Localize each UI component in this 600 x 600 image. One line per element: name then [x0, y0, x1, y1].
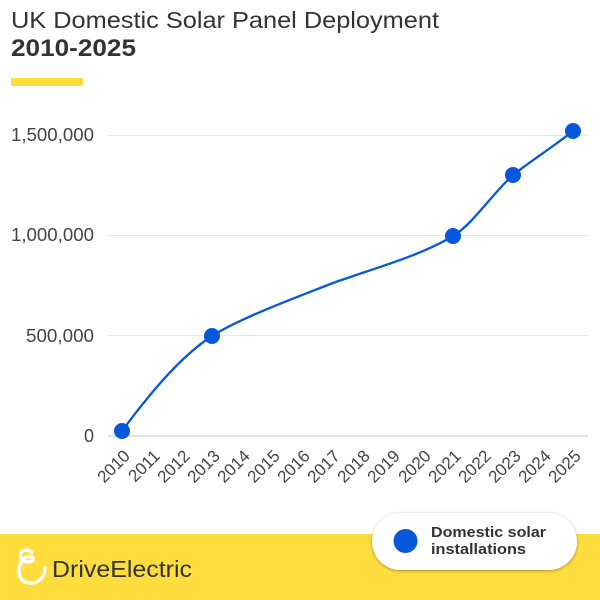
- legend: Domestic solar: [431, 524, 546, 541]
- x-axis year labels: 2022: [455, 446, 495, 487]
- x-axis year labels: 2025: [545, 446, 585, 487]
- x-axis year labels: 2013: [184, 446, 224, 487]
- title: [11, 7, 440, 62]
- x-axis year labels: 2012: [154, 446, 194, 487]
- x-axis year labels: 2016: [274, 446, 314, 487]
- x-axis year labels: 2021: [425, 446, 465, 487]
- x-axis year labels: 2020: [395, 446, 435, 487]
- x-axis year labels: 2017: [304, 446, 344, 487]
- y-axis labels: [11, 125, 94, 446]
- x-axis year labels: 2023: [485, 446, 525, 487]
- legend: installations: [431, 541, 526, 558]
- x-axis year labels: 2015: [244, 446, 284, 487]
- x-axis year labels: 2018: [334, 446, 374, 487]
- icon: DriveElectric logo: [19, 550, 45, 583]
- title: 2010-2025: [11, 35, 136, 62]
- x-axis year labels: 2010: [94, 446, 134, 487]
- x-axis year labels: 2014: [214, 446, 254, 487]
- line chart: domestic solar installations: [114, 123, 581, 439]
- x-axis year labels: 2011: [125, 446, 164, 486]
- y-axis labels: 1,000,000: [11, 225, 94, 245]
- footer band: [0, 534, 600, 600]
- x-axis year labels: [94, 446, 585, 487]
- legend: [372, 513, 577, 570]
- title: UK Domestic Solar Panel Deployment: [11, 7, 440, 33]
- x-axis year labels: 2019: [364, 446, 404, 487]
- logo wordmark: DriveElectric: [52, 556, 192, 582]
- y-axis labels: 1,500,000: [11, 125, 94, 145]
- x-axis year labels: 2024: [515, 446, 555, 487]
- y-axis labels: 0: [84, 426, 94, 446]
- y-axis labels: 500,000: [26, 326, 94, 346]
- yellow accent bar: [11, 78, 83, 86]
